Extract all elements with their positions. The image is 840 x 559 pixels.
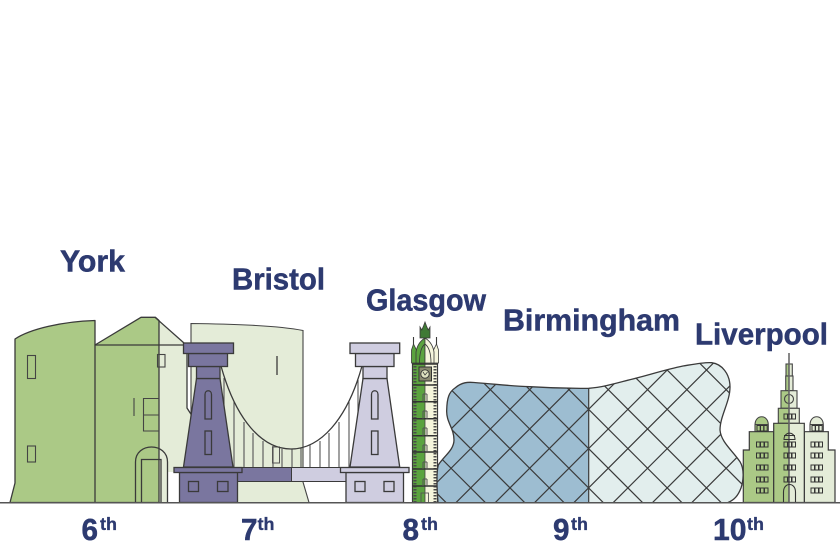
spire and upper tower <box>778 353 799 423</box>
city label: Birmingham: Birmingham <box>503 304 680 338</box>
rank: 9th: th <box>571 514 588 534</box>
right tower <box>340 343 409 502</box>
bridge deck <box>237 468 346 482</box>
rank: 10th: th <box>747 514 764 534</box>
rank: 10th: 10 <box>713 513 746 547</box>
clock <box>419 367 432 381</box>
icon: Bristol bridge <box>174 343 409 502</box>
rank: 6th <box>82 513 117 547</box>
building: Bristol backdrop <box>191 324 309 502</box>
rank: 8th <box>402 513 438 547</box>
rank: 9th <box>553 513 588 547</box>
building: Birmingham library <box>436 362 743 502</box>
city label: York: York <box>60 244 125 278</box>
building: Glasgow tower <box>412 322 438 502</box>
domes <box>755 417 823 432</box>
city label: Liverpool: Liverpool <box>695 318 828 352</box>
rank: 8th: 8 <box>402 513 419 547</box>
rank: 6th: 6 <box>82 513 98 547</box>
city label: Bristol: Bristol <box>232 262 325 296</box>
building: Liverpool <box>743 353 835 502</box>
lattice <box>438 364 742 502</box>
city label: Glasgow: Glasgow <box>366 284 486 318</box>
rank: 7th: th <box>258 514 274 534</box>
rank: 10th <box>713 513 764 547</box>
rank: 7th: 7 <box>241 513 258 547</box>
rank: 6th: th <box>100 514 117 534</box>
building: York <box>10 317 192 502</box>
windows <box>756 414 822 502</box>
tower crown <box>412 322 438 363</box>
wings <box>743 432 774 502</box>
rank: 8th: th <box>421 514 438 534</box>
ground line <box>0 502 840 504</box>
left tower <box>174 343 242 502</box>
rank: 9th: 9 <box>553 513 570 547</box>
bridge hangers and cable <box>221 366 362 467</box>
rank: 7th <box>241 513 274 547</box>
